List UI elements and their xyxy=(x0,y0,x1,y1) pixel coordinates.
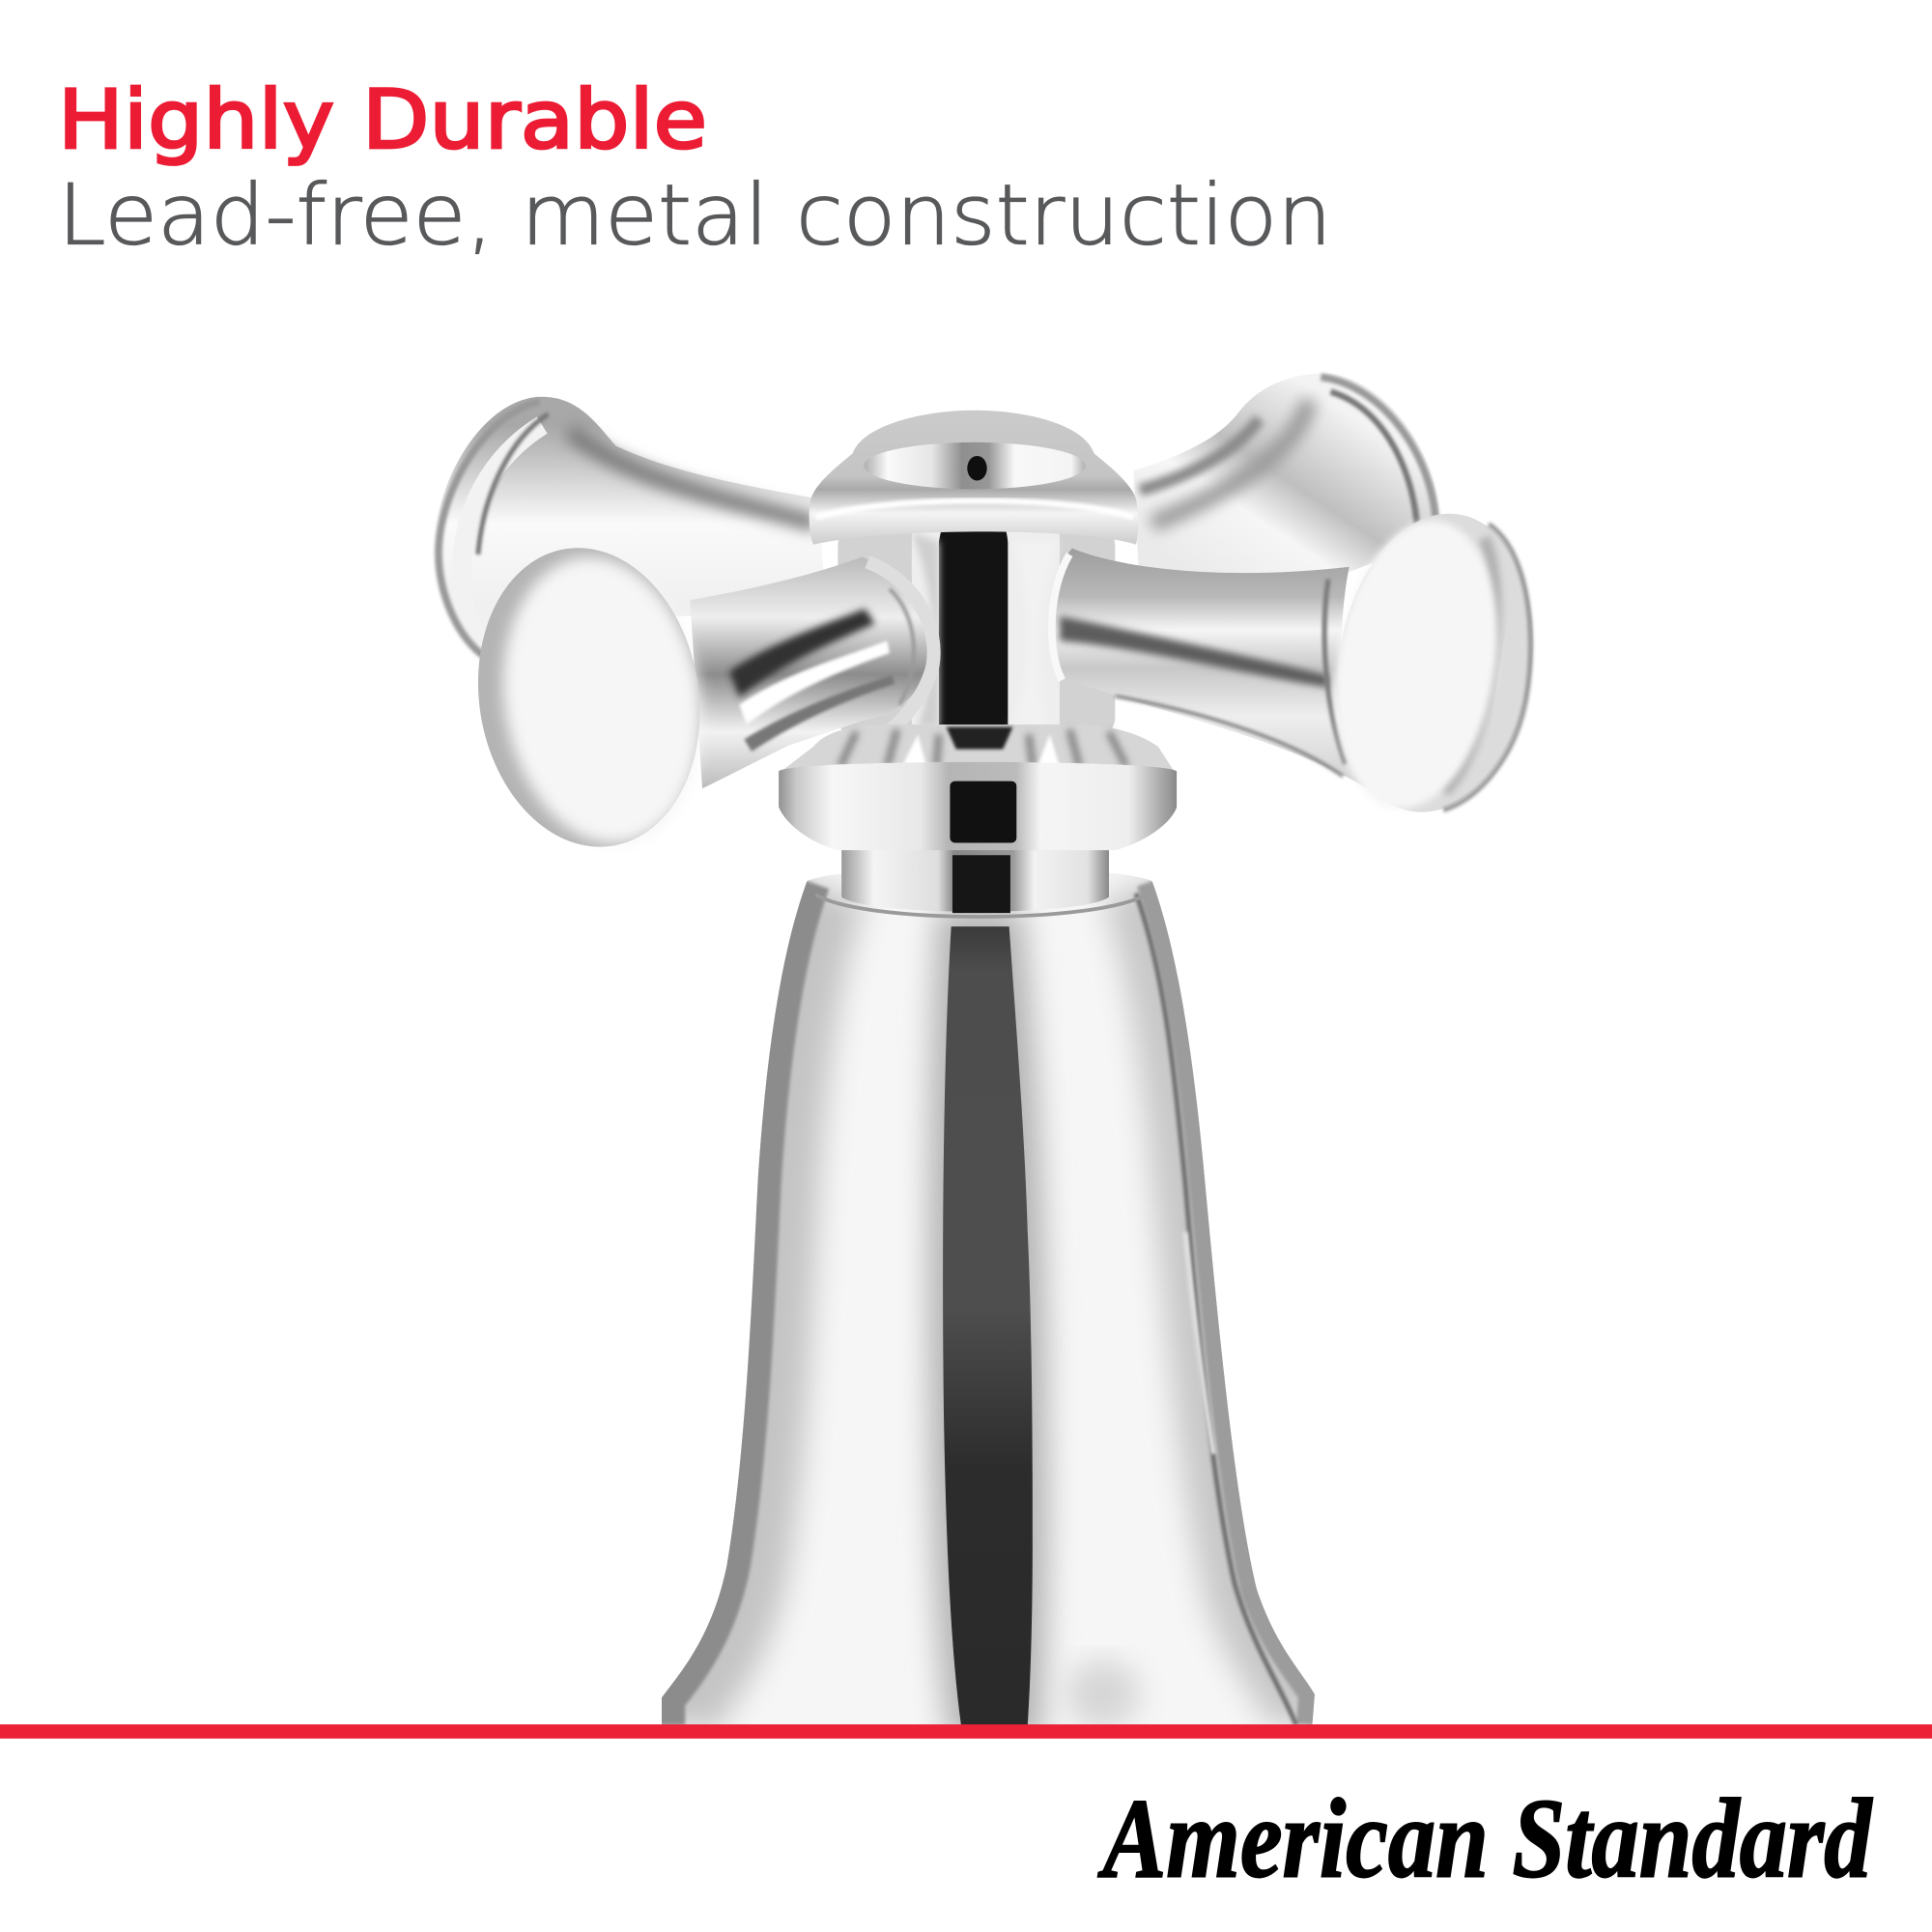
right soft shading xyxy=(1152,881,1315,1725)
front left knob xyxy=(457,531,721,863)
bell body xyxy=(640,850,1331,1737)
rear left arm xyxy=(435,397,826,659)
left soft shading xyxy=(662,881,807,1725)
dark stripe xyxy=(943,926,1033,1725)
rear right arm xyxy=(1133,373,1439,591)
bottom right smudge xyxy=(1065,1660,1140,1729)
neck xyxy=(815,848,1146,917)
front right arm xyxy=(1052,549,1368,788)
ring xyxy=(779,762,1177,850)
right edge band xyxy=(1152,881,1315,1725)
right inner dark line xyxy=(1136,894,1296,1725)
cap top xyxy=(810,411,1138,545)
right highlight line xyxy=(1185,1233,1213,1454)
front right knob xyxy=(1316,499,1554,826)
left edge band xyxy=(662,881,807,1725)
faceted flange xyxy=(781,724,1175,771)
soft shadow beside stripe xyxy=(943,924,1034,1725)
heading: Highly Durable: Highly Durable xyxy=(58,72,707,167)
subheading: Lead-free, metal construction: Lead-free, metal construction xyxy=(58,167,1332,265)
front left arm xyxy=(690,557,936,788)
red divider bar xyxy=(0,1724,1932,1739)
faucet handle product image xyxy=(435,373,1554,1737)
hub column xyxy=(838,502,1115,739)
